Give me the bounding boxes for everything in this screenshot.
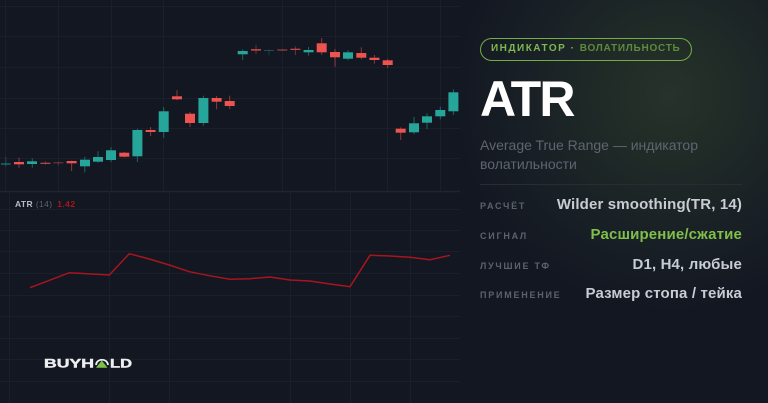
subtitle — [480, 137, 698, 172]
row: timeframes: D1, H4, любые — [632, 256, 742, 273]
row: calculation: Wilder smoothing(TR, 14) — [557, 196, 742, 213]
ATR legend: ATR (14) 1.42 — [15, 199, 75, 209]
row: timeframes: ЛУЧШИЕ ТФ — [480, 261, 551, 271]
row: timeframes — [480, 256, 742, 273]
row: signal: Расширение/сжатие — [591, 226, 742, 243]
row: usage — [480, 285, 742, 302]
panel: chart — [0, 0, 460, 403]
ATR line — [30, 254, 450, 288]
row: signal: СИГНАЛ — [480, 231, 528, 241]
row: usage: ПРИМЕНЕНИЕ — [480, 290, 561, 300]
divider — [480, 184, 742, 185]
candlestick chart — [1, 38, 458, 172]
badge — [480, 38, 692, 60]
row: usage: Размер стопа / тейка — [585, 285, 742, 302]
row: signal — [480, 226, 742, 243]
panel: info — [460, 0, 768, 403]
subtitle: Average True Range — индикатор — [480, 137, 698, 153]
badge: ИНДИКАТОР · ВОЛАТИЛЬНОСТЬ — [491, 43, 680, 54]
subtitle: волатильности — [480, 156, 577, 172]
logo — [44, 358, 132, 369]
row: calculation: РАСЧЁТ — [480, 201, 526, 211]
title: ATR — [480, 71, 574, 127]
